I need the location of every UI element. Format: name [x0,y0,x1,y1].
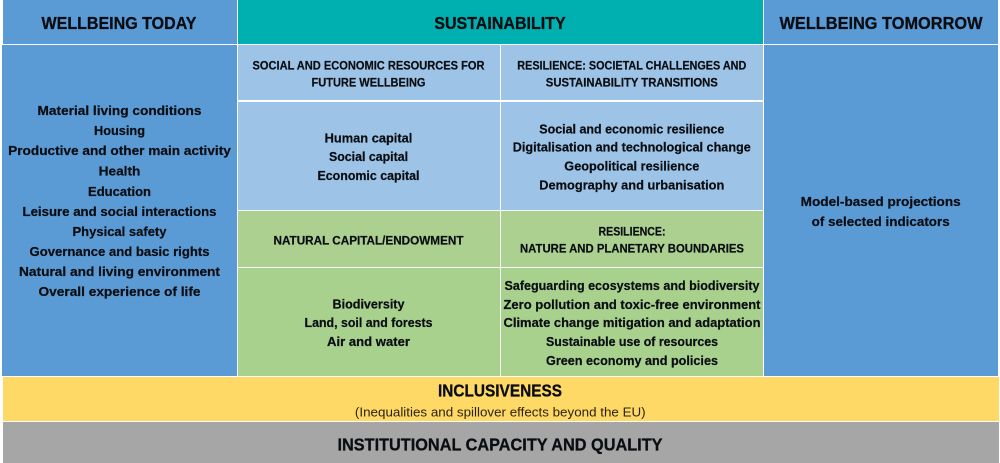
panel: wellbeing today dimensions: Governance and basic rights [30,244,209,259]
panel: societal resilience list: Digitalisation and technological change [513,140,751,155]
panel: institutional capacity band: INSTITUTIONAL CAPACITY AND QUALITY [338,434,663,454]
panel: wellbeing tomorrow header [764,0,998,44]
panel: planetary resilience list: Zero pollution and toxic-free environment [504,297,761,312]
panel: societal resilience list [501,102,763,210]
panel: planetary resilience list: Sustainable use of resources [546,334,718,349]
panel: wellbeing today dimensions: Education [88,184,151,199]
panel: societal resilience heading: SUSTAINABILITY TRANSITIONS [546,76,718,90]
panel: wellbeing today dimensions: Housing [94,123,145,138]
panel: societal resilience heading: RESILIENCE: SOCIETAL CHALLENGES AND [517,58,747,72]
panel: societal resilience list: Geopolitical resilience [564,159,699,174]
panel: capital list [238,102,500,210]
panel: capital list: Social capital [329,149,408,164]
panel: sustainability header: SUSTAINABILITY [434,13,566,33]
panel: wellbeing today dimensions: Physical safety [72,224,167,239]
panel: natural capital list: Land, soil and forests [304,315,432,330]
panel: wellbeing today dimensions: Leisure and social interactions [22,204,216,219]
panel: natural capital heading: NATURAL CAPITAL/ENDOWMENT [274,233,464,247]
panel: planetary resilience list: Green economy and policies [546,353,718,368]
panel: societal resilience list: Social and economic resilience [539,121,724,136]
panel: inclusiveness band [3,377,999,421]
panel: inclusiveness band: INCLUSIVENESS [438,381,562,401]
panel: wellbeing today dimensions: Productive and other main activity [8,143,232,158]
panel: planetary resilience heading [501,211,763,267]
panel: planetary resilience list: Safeguarding ecosystems and biodiversity [504,278,760,293]
panel: wellbeing today header [3,0,237,44]
panel: wellbeing today dimensions: Health [99,164,140,179]
panel: social and economic resources heading: FUTURE WELLBEING [312,76,426,90]
panel: wellbeing tomorrow projections: Model-based projections [801,194,961,209]
panel: capital list: Human capital [325,131,412,146]
panel: planetary resilience heading: RESILIENCE: [598,224,666,238]
panel: natural capital list: Biodiversity [332,297,405,312]
panel: natural capital list: Air and water [327,334,410,349]
panel: wellbeing tomorrow header: WELLBEING TOMORROW [780,13,983,33]
panel: institutional capacity band [3,422,999,463]
panel: social and economic resources heading: SOCIAL AND ECONOMIC RESOURCES FOR [252,58,485,72]
panel: planetary resilience heading: NATURE AND PLANETARY BOUNDARIES [520,242,744,256]
panel: wellbeing tomorrow projections [764,45,998,376]
panel: planetary resilience list: Climate change mitigation and adaptation [504,315,761,330]
panel: capital list: Economic capital [318,168,420,183]
panel: social and economic resources heading [238,45,500,100]
panel: sustainability header [238,0,763,44]
panel: planetary resilience list [501,268,763,376]
panel: wellbeing today dimensions [2,45,237,376]
panel: wellbeing today dimensions: Overall experience of life [38,284,200,299]
panel: inclusiveness band: (Inequalities and spillover effects beyond the EU) [355,406,646,420]
panel: wellbeing tomorrow projections: of selected indicators [812,214,950,229]
panel: societal resilience list: Demography and urbanisation [539,178,724,193]
panel: wellbeing today header: WELLBEING TODAY [42,13,197,33]
panel: societal resilience heading [501,45,763,100]
panel: wellbeing today dimensions: Natural and living environment [19,264,221,279]
panel: wellbeing today dimensions: Material living conditions [38,103,202,118]
panel: natural capital list [238,268,500,376]
panel: natural capital heading [238,211,500,267]
